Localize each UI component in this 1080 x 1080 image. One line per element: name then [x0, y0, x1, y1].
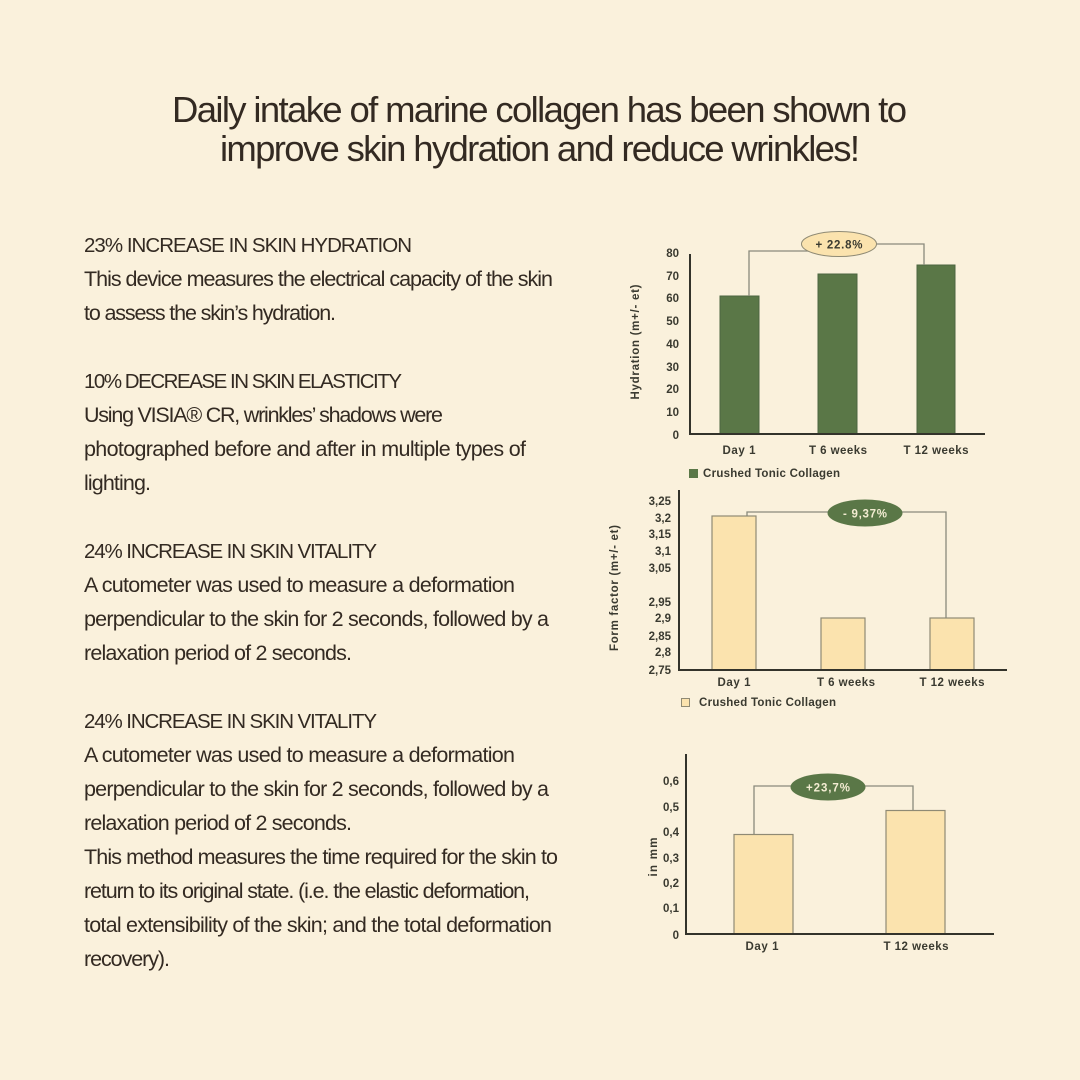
y axis tick labels: hydration: 30 [666, 362, 679, 374]
description: vitality, extended [84, 743, 558, 971]
description: vitality [84, 573, 549, 665]
y axis tick labels: form factor: 2,85 [649, 631, 672, 643]
description: vitality: A cutometer was used to measure a deformation [84, 573, 515, 597]
category labels: in mm: Day 1 [746, 941, 779, 953]
text block: skin hydration [84, 234, 553, 325]
y axis tick labels: form factor: 3,1 [655, 546, 672, 558]
heading: elasticity: 10% DECREASE IN SKIN ELASTICITY [84, 370, 402, 393]
callout: +22.8%: + 22.8% [816, 240, 862, 252]
description: elasticity: photographed before and after in multiple types of [84, 437, 526, 461]
legend: form factor: Crushed Tonic Collagen [699, 697, 836, 709]
description: vitality, extended: recovery). [84, 947, 170, 971]
y axis tick labels: hydration: 70 [666, 271, 679, 283]
axes: hydration [690, 254, 985, 434]
y axis tick labels: in mm: 0,4 [663, 827, 680, 839]
category labels: hydration: T 6 weeks [809, 445, 867, 457]
y axis tick labels: in mm: 0 [673, 930, 679, 942]
text block: skin elasticity [84, 370, 526, 495]
y axis tick labels: hydration: 10 [666, 407, 679, 419]
y axis tick labels: form factor: 3,25 [649, 496, 672, 508]
category labels: hydration: Day 1 [722, 445, 756, 457]
y axis title: hydration: Hydration (m+/- et) [630, 284, 642, 400]
description: vitality, extended: A cutometer was used to measure a deformation [84, 743, 515, 767]
y axis tick labels: form factor: 3,05 [649, 563, 672, 575]
legend: hydration: Crushed Tonic Collagen [703, 468, 840, 480]
heading: vitality: 24% INCREASE IN SKIN VITALITY [84, 540, 377, 563]
y axis tick labels: hydration: 50 [666, 316, 679, 328]
description: vitality, extended: total extensibility of the skin; and the total deformation [84, 913, 552, 937]
bars: form factor [712, 516, 974, 670]
axes: form factor [679, 490, 1007, 670]
category labels: form factor: Day 1 [718, 677, 751, 689]
connector: form factor [747, 512, 946, 618]
y axis tick labels: form factor: 3,2 [655, 513, 671, 525]
chart: form factor [609, 490, 1007, 709]
y axis tick labels: hydration [666, 248, 679, 442]
description: vitality, extended: relaxation period of 2 seconds. [84, 811, 352, 835]
bars: in mm [734, 810, 945, 934]
connector: in mm [754, 786, 913, 834]
y axis tick labels: in mm: 0,6 [663, 776, 679, 788]
text block: skin vitality, extended [84, 710, 558, 971]
y axis tick labels: hydration: 40 [666, 339, 679, 351]
category labels: form factor [718, 677, 984, 689]
y axis tick labels: hydration: 60 [666, 293, 679, 305]
description: elasticity: lighting. [84, 471, 151, 495]
y axis tick labels: in mm: 0,2 [663, 878, 679, 890]
title: improve skin hydration and reduce wrinkles! [220, 128, 860, 169]
y axis tick labels: form factor: 2,75 [649, 665, 672, 677]
y axis tick labels: in mm: 0,5 [663, 802, 680, 814]
description: vitality: perpendicular to the skin for 2 seconds, followed by a [84, 607, 549, 631]
description: elasticity: Using VISIA® CR, wrinkles’ shadows were [84, 403, 443, 427]
bars: hydration [720, 265, 955, 434]
callout: -9,37% [828, 500, 902, 526]
chart: depth in mm [648, 754, 994, 953]
category labels: form factor: T 12 weeks [920, 677, 984, 689]
category labels: hydration [722, 445, 968, 457]
description: elasticity [84, 403, 526, 495]
description: vitality, extended: return to its original state. (i.e. the elastic deformation, [84, 879, 530, 903]
description: vitality, extended: perpendicular to the skin for 2 seconds, followed by a [84, 777, 549, 801]
y axis tick labels: form factor: 2,8 [655, 647, 672, 659]
category labels: in mm: T 12 weeks [884, 941, 948, 953]
callout: +23,7% [790, 774, 866, 800]
heading: vitality, extended: 24% INCREASE IN SKIN VITALITY [84, 710, 377, 733]
y axis tick labels: form factor: 3,15 [649, 529, 672, 541]
y axis tick labels: in mm: 0,1 [663, 903, 680, 915]
axes: in mm [686, 754, 994, 934]
y axis title: in mm: in mm [648, 838, 660, 876]
y axis tick labels: hydration: 20 [666, 384, 679, 396]
y axis title: form factor: Form factor (m+/- et) [609, 525, 621, 651]
description: hydration: to assess the skin’s hydration. [84, 301, 336, 325]
description: vitality, extended: This method measures the time required for the skin to [84, 845, 558, 869]
y axis tick labels: form factor [649, 496, 672, 677]
description: vitality: relaxation period of 2 seconds. [84, 641, 352, 665]
title [172, 89, 907, 169]
y axis tick labels: form factor: 2,9 [655, 613, 671, 625]
y axis tick labels: form factor: 2,95 [649, 597, 672, 609]
callout: +22.8% [802, 232, 876, 256]
y axis tick labels: in mm [663, 776, 680, 942]
description: hydration [84, 267, 553, 325]
category labels: in mm [746, 941, 948, 953]
y axis tick labels: hydration: 0 [673, 430, 679, 442]
description: hydration: This device measures the electrical capacity of the skin [84, 267, 553, 291]
category labels: hydration: T 12 weeks [904, 445, 968, 457]
callout: -9,37%: - 9,37% [843, 508, 887, 520]
text block: skin vitality [84, 540, 549, 665]
y axis tick labels: in mm: 0,3 [663, 853, 679, 865]
connector: hydration [749, 244, 924, 296]
callout: +23,7%: +23,7% [806, 782, 850, 794]
chart: hydration [630, 232, 985, 480]
category labels: form factor: T 6 weeks [817, 677, 875, 689]
heading: hydration: 23% INCREASE IN SKIN HYDRATION [84, 234, 412, 257]
title: Daily intake of marine collagen has been shown to [172, 89, 907, 130]
y axis tick labels: hydration: 80 [666, 248, 679, 260]
